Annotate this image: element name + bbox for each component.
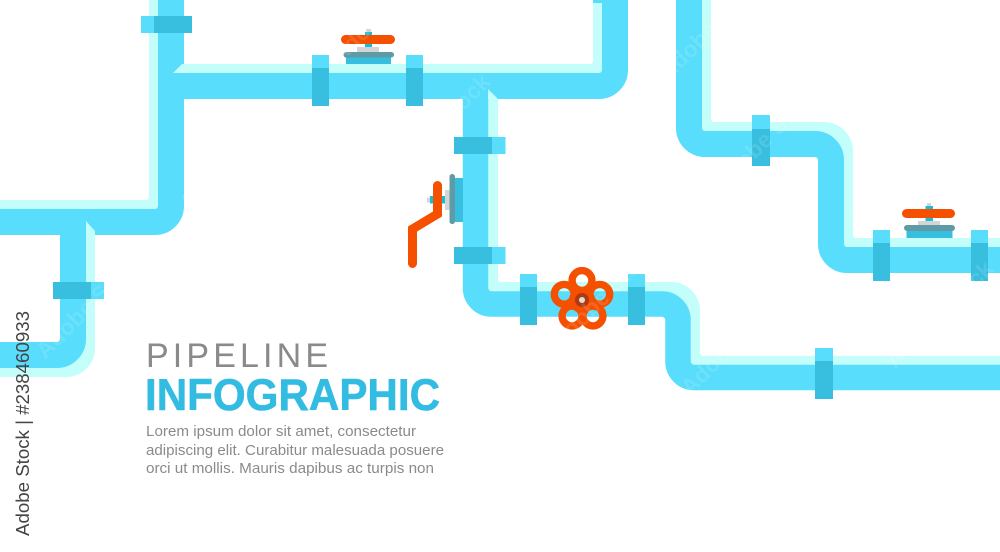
watermarks: Adobe Stock: Adobe Stock <box>708 77 826 195</box>
watermarks: Adobe Stock: Adobe Stock <box>675 282 793 400</box>
text block: description <box>146 424 444 477</box>
watermarks: Adobe Stock: Adobe Stock <box>841 113 959 231</box>
pipe: centre branch running to the lower right <box>476 89 1000 378</box>
icon: side valve with bent lever <box>412 174 463 264</box>
watermarks: Adobe Stock: Adobe Stock <box>387 398 505 516</box>
text block: description: orci ut mollis. Mauris dapibus ac turpis non <box>146 461 434 477</box>
icon: right valve <box>902 203 955 238</box>
text block: description: Lorem ipsum dolor sit amet, consectetur <box>146 424 416 440</box>
watermarks: Adobe Stock: Adobe Stock <box>30 245 148 363</box>
watermarks: Adobe Stock: Adobe Stock <box>515 432 633 550</box>
text block: description: adipiscing elit. Curabitur malesuada posuere <box>146 443 444 459</box>
watermarks: Adobe Stock: Adobe Stock <box>50 410 168 528</box>
watermarks: Adobe Stock: Adobe Stock <box>40 57 158 175</box>
heading: PIPELINE: PIPELINE <box>146 337 328 375</box>
flanges: pipe collars <box>53 16 988 399</box>
pipe: right side line <box>689 0 1000 260</box>
watermarks: Adobe Stock: Adobe Stock <box>505 107 623 225</box>
icon: top valve <box>341 29 395 64</box>
pipe: upper left main line <box>0 0 171 222</box>
stock credit: vertical text: Adobe Stock | #238460933 <box>13 311 33 536</box>
watermarks: Adobe Stock: Adobe Stock <box>220 220 338 338</box>
watermarks: Adobe Stock: Adobe Stock <box>545 235 663 353</box>
watermarks: Adobe Stock: Adobe Stock <box>345 260 463 378</box>
watermarks: Adobe Stock: Adobe Stock <box>880 255 998 373</box>
watermarks: Adobe Stock: Adobe Stock <box>377 68 495 186</box>
icon: red valve wheel <box>554 271 610 326</box>
pipe: lower left branch <box>0 221 95 364</box>
watermarks: Adobe Stock: Adobe Stock <box>173 97 291 215</box>
watermarks: Adobe Stock: Adobe Stock <box>720 408 838 526</box>
pipe: top horizontal line with elbow <box>171 0 615 86</box>
heading: INFOGRAPHIC: INFOGRAPHIC <box>145 371 440 420</box>
